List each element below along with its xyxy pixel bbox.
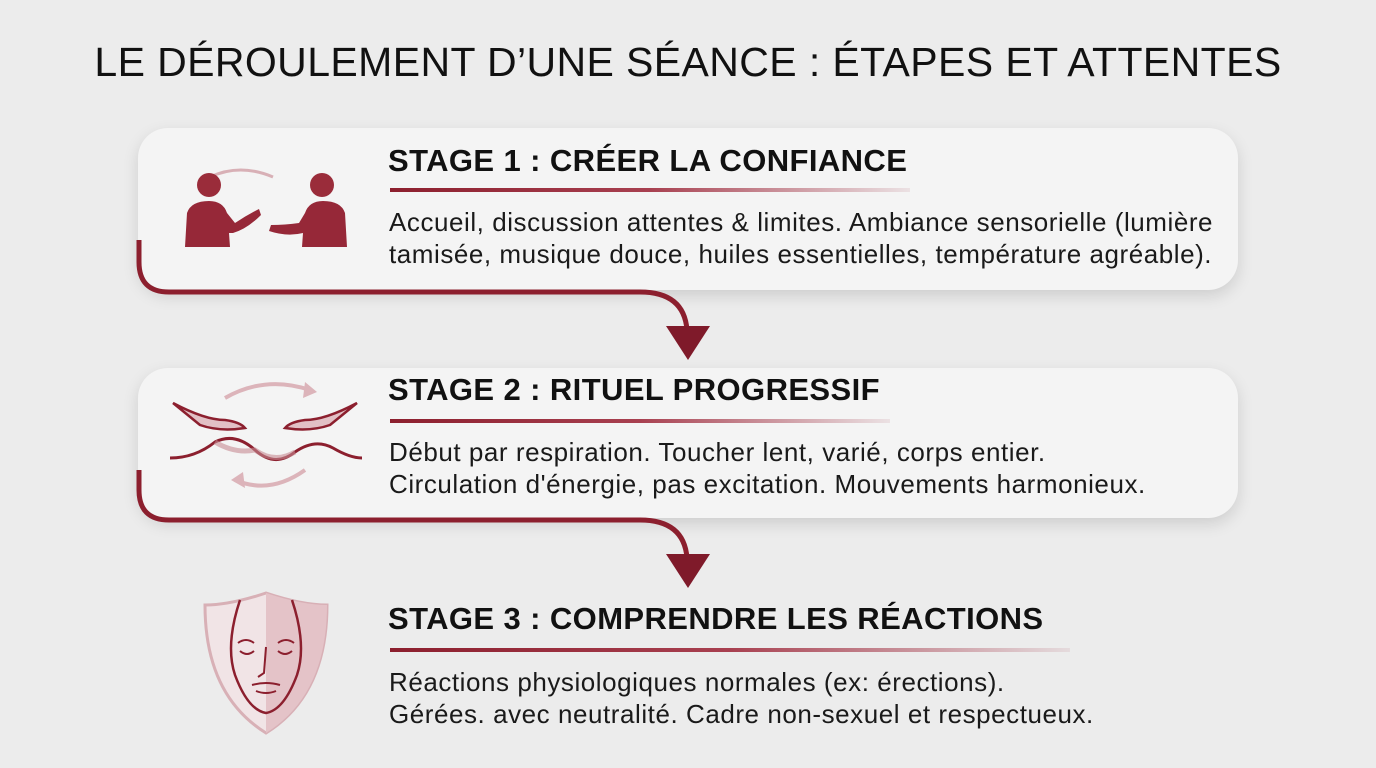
text: stage 1 [389, 207, 1213, 269]
text: stage 3: Réactions physiologiques normales (ex: érections). [389, 667, 1005, 697]
text: stage 1: Accueil, discussion attentes & limites. Ambiance sensorielle (lumière [389, 207, 1213, 237]
icon: shield face [204, 592, 328, 735]
text: stage 2: Circulation d'énergie, pas excitation. Mouvements harmonieux. [389, 469, 1146, 499]
icon: hands and waves [170, 382, 362, 488]
text: stage 2 [389, 437, 1146, 499]
arrow: stage 2 to 3 [139, 470, 710, 588]
card: stage 1 [138, 128, 1238, 290]
text: stage 1: tamisée, musique douce, huiles essentielles, température agréable). [389, 239, 1212, 269]
text: stage 3 [389, 667, 1094, 729]
title: LE DÉROULEMENT D’UNE SÉANCE : ÉTAPES ET ATTENTES [94, 39, 1282, 85]
icon: two people [185, 168, 347, 247]
heading: stage 1: STAGE 1 : CRÉER LA CONFIANCE [388, 143, 907, 178]
arrow: stage 1 to 2 [139, 240, 710, 360]
card: stage 2 [138, 368, 1238, 518]
heading: stage 3: STAGE 3 : COMPRENDRE LES RÉACTIONS [388, 601, 1043, 636]
heading: stage 2: STAGE 2 : RITUEL PROGRESSIF [388, 372, 880, 407]
text: stage 2: Début par respiration. Toucher lent, varié, corps entier. [389, 437, 1046, 467]
text: stage 3: Gérées. avec neutralité. Cadre non-sexuel et respectueux. [389, 699, 1094, 729]
